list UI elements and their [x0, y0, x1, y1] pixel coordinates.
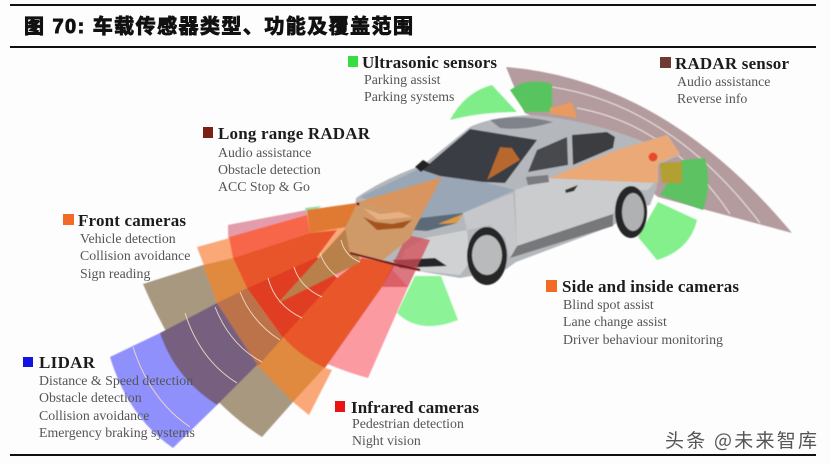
ripple arcs	[133, 240, 360, 427]
door panel	[515, 178, 655, 246]
legend: Front cameras	[63, 211, 190, 281]
mirror	[526, 175, 549, 185]
legend: Infrared cameras: Infrared cameras	[351, 398, 479, 417]
lidar wedge	[110, 333, 217, 448]
side camera wedge	[197, 203, 357, 415]
door handles	[565, 167, 622, 193]
legend: LIDAR: Distance & Speed detection	[39, 373, 193, 388]
coverage: RADAR sensor arc	[506, 67, 792, 233]
bumper	[400, 230, 470, 275]
legend: Long range RADAR	[203, 124, 371, 194]
title: 图 70: 车载传感器类型、功能及覆盖范围	[24, 14, 413, 38]
legend: Ultrasonic sensors: Parking systems	[364, 89, 454, 104]
legend: Side and inside cameras: Blind spot assist	[563, 297, 654, 312]
legend: Infrared cameras	[335, 398, 479, 448]
legend: Side and inside cameras: Driver behaviour monitoring	[563, 332, 723, 347]
side windows	[528, 137, 568, 172]
legend: Ultrasonic sensors: Ultrasonic sensors	[362, 53, 497, 72]
car	[350, 115, 680, 285]
watermark: 头条 @未来智库	[665, 426, 817, 453]
legend: Long range RADAR: ACC Stop & Go	[218, 179, 310, 194]
tail light	[648, 152, 658, 162]
legend: LIDAR: Obstacle detection	[39, 390, 142, 405]
legend: Long range RADAR: Audio assistance	[218, 145, 311, 160]
legend: LIDAR	[23, 353, 195, 440]
car body	[350, 115, 680, 278]
legend: Front cameras: Front cameras	[78, 211, 186, 230]
headlight	[412, 213, 463, 231]
sunroof	[490, 117, 553, 129]
legend: RADAR sensor	[660, 54, 789, 106]
front fender	[463, 193, 517, 258]
front face beam	[345, 202, 420, 260]
legend: Long range RADAR: Long range RADAR	[218, 124, 371, 143]
long range radar wedge	[229, 215, 310, 258]
legend: Side and inside cameras: Side and inside cameras	[562, 277, 739, 296]
lower grille	[393, 258, 447, 268]
coverage: rear side beams	[487, 135, 682, 185]
legend: Front cameras: Collision avoidance	[80, 248, 190, 263]
legend: Infrared cameras: Pedestrian detection	[352, 416, 464, 431]
legend: Infrared cameras: Night vision	[352, 433, 421, 448]
legend: Front cameras: Sign reading	[80, 266, 150, 281]
legend: LIDAR: Emergency braking systems	[39, 425, 195, 440]
legend: Front cameras: Vehicle detection	[80, 231, 176, 246]
beam end on bumper	[382, 235, 430, 287]
rear wheel	[615, 186, 647, 238]
infrared camera wedge	[228, 203, 408, 378]
narrow beam	[278, 227, 361, 303]
legend: RADAR sensor: Audio assistance	[677, 74, 770, 89]
legend: RADAR sensor: Reverse info	[677, 91, 747, 106]
hood	[360, 167, 515, 218]
orange overlap	[203, 258, 325, 402]
front wheel	[467, 227, 507, 285]
legend: Side and inside cameras	[546, 277, 739, 347]
windshield	[422, 129, 537, 183]
legend: Long range RADAR: Obstacle detection	[218, 162, 321, 177]
coverage: ultrasonic green zones	[397, 82, 708, 326]
front camera wedge	[143, 265, 293, 437]
legend: LIDAR: LIDAR	[39, 353, 96, 372]
legend: LIDAR: Collision avoidance	[39, 408, 149, 423]
legend: RADAR sensor: RADAR sensor	[675, 54, 789, 73]
legend: Ultrasonic sensors: Parking assist	[364, 72, 441, 87]
legend: Ultrasonic sensors	[348, 53, 497, 104]
coverage: front sensor wedges	[110, 177, 442, 448]
legend: Side and inside cameras: Lane change assist	[563, 314, 667, 329]
